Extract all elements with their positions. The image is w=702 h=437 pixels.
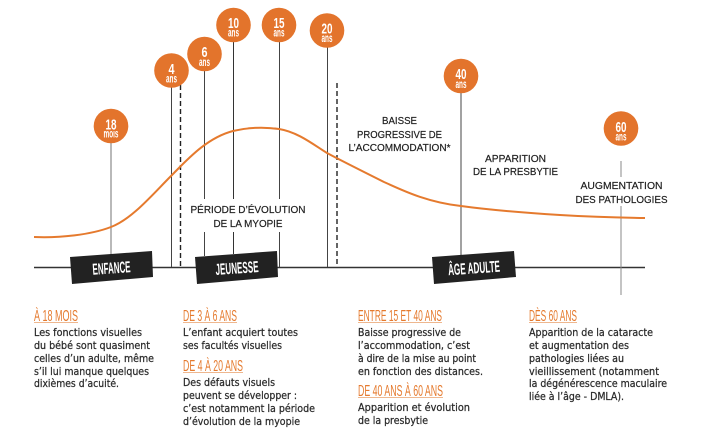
badge: 4 ans: [154, 53, 189, 88]
badge: 40 ans: ans: [456, 77, 467, 91]
heading: de 40 ans à 60 ans: DE 40 ANS À 60 ANS: [358, 383, 443, 400]
horizontal age axis: [34, 266, 645, 268]
marker line: 15 ans upper: [278, 40, 280, 199]
text: apparition de la cataracte: [529, 327, 667, 403]
text: enfant acquiert: ses facultés visuelles: [183, 340, 282, 352]
badge: 18 mois: 18: [106, 116, 116, 134]
badge: 20 ans: [310, 13, 344, 48]
text: apparition et évolution: de la presbytie: [358, 415, 428, 427]
heading: entre 15 et 40 ans: ENTRE 15 ET 40 ANS: [358, 308, 442, 325]
badge: 4 ans: ans: [166, 72, 177, 86]
text: baisse progressive: l’accommodation, c’est: [358, 340, 470, 352]
text: enfant acquiert: L’enfant acquiert toutes: [183, 327, 298, 339]
badge: 40 ans: [444, 59, 478, 93]
marker line: 10 ans upper: [232, 40, 234, 199]
marker line: 20 ans: [326, 45, 328, 267]
badge: 6 ans: 6: [202, 44, 208, 61]
text: apparition de la cataracte: vieillissement (notamment: [529, 366, 659, 378]
badge: 20 ans: ans: [322, 31, 333, 45]
text: apparition de la cataracte: la dégénérescence maculaire: [529, 378, 667, 390]
heading: de 3 à 6 ans: DE 3 À 6 ANS: [183, 308, 237, 325]
marker line: 60 ans upper: [620, 161, 622, 177]
marker line: 60 ans lower: [620, 206, 622, 295]
column: de 3 à 20 ans: [183, 308, 315, 428]
text: défauts visuels: [183, 377, 315, 428]
label: apparition de la presbytie: [473, 153, 558, 178]
marker line: 6 ans lower: [204, 232, 206, 256]
marker line: 15 ans lower: [278, 232, 280, 267]
text: apparition et évolution: Apparition et évolution: [358, 402, 470, 414]
badge: 60 ans: ans: [616, 130, 627, 144]
label: période d'évolution de la myopie: [190, 203, 306, 230]
text: fonctions visuelles: celles d’un adulte, même: [34, 353, 154, 365]
label: augmentation des pathologies: AUGMENTATION: [580, 180, 662, 192]
badge: 60 ans: [604, 111, 638, 146]
column: de 15 à 60 ans: [358, 308, 483, 427]
text: baisse progressive: à dire de la mise au point: [358, 353, 476, 365]
dashed boundary left: [180, 85, 182, 267]
label: baisse progressive de l'accommodation: L’ACCOMMODATION*: [348, 142, 450, 154]
tag: âge adulte: [432, 251, 516, 284]
label: baisse progressive de l'accommodation: PROGRESSIVE DE: [357, 129, 442, 141]
column: à 18 mois: [34, 308, 154, 390]
text: fonctions visuelles: Les fonctions visuelles: [34, 327, 142, 339]
text: apparition de la cataracte: pathologies liées au: [529, 353, 624, 365]
tag: jeunesse: [195, 251, 278, 284]
text: enfant acquiert: [183, 327, 298, 352]
label: période d'évolution de la myopie: DE LA MYOPIE: [214, 218, 282, 230]
badge: 4 ans: 4: [168, 61, 175, 78]
badge: 6 ans: ans: [199, 55, 210, 69]
badge: 18 mois: mois: [104, 126, 119, 140]
label: augmentation des pathologies: [576, 180, 668, 206]
badge: 15 ans: [262, 8, 296, 42]
badge: 40 ans: 40: [456, 66, 466, 83]
heading: de 4 à 20 ans: DE 4 À 20 ANS: [183, 358, 243, 375]
marker line: 18 mois: [110, 140, 112, 255]
text: défauts visuels: d’évolution de la myopie: [183, 416, 300, 428]
label: apparition de la presbytie: DE LA PRESBYTIE: [473, 166, 558, 178]
badge: 15 ans: 15: [274, 15, 284, 32]
label: baisse progressive de l'accommodation: [348, 115, 450, 154]
text: défauts visuels: Des défauts visuels: [183, 377, 275, 389]
badge: 20 ans: 20: [322, 20, 332, 38]
marker line: 6 ans upper: [204, 68, 206, 199]
text: baisse progressive: [358, 327, 483, 378]
text: fonctions visuelles: s’il lui manque quelques: [34, 366, 149, 378]
text: apparition et évolution: [358, 402, 470, 427]
badge: 60 ans: 60: [616, 119, 626, 136]
text: apparition de la cataracte: Apparition de la cataracte: [529, 327, 653, 339]
text: défauts visuels: c’est notamment la période: [183, 403, 315, 415]
label: baisse progressive de l'accommodation: BAISSE: [382, 115, 417, 127]
text: fonctions visuelles: du bébé sont quasiment: [34, 340, 150, 352]
badge: 10 ans: ans: [228, 26, 239, 40]
text: apparition de la cataracte: et augmentation des: [529, 340, 629, 352]
text: fonctions visuelles: [34, 327, 154, 390]
badge: 10 ans: 10: [228, 15, 239, 32]
badge: 18 mois: [94, 109, 128, 143]
marker line: 4 ans: [170, 85, 172, 267]
badge: 6 ans: [187, 37, 222, 71]
dashed boundary right: [336, 83, 338, 267]
tag: enfance: [70, 251, 153, 284]
tag: jeunesse: JEUNESSE: [215, 259, 259, 279]
text: défauts visuels: peuvent se développer :: [183, 390, 297, 402]
label: augmentation des pathologies: DES PATHOLOGIES: [576, 194, 668, 206]
column: dès 60 ans: [529, 308, 667, 403]
badge: 15 ans: ans: [274, 26, 285, 40]
badge: 10 ans: [216, 8, 251, 42]
accommodation curve: [34, 128, 645, 237]
marker line: 40 ans: [460, 90, 462, 256]
tag: âge adulte: ÂGE ADULTE: [447, 257, 501, 279]
text: apparition de la cataracte: liée à l’âge - DMLA).: [529, 391, 624, 403]
text: fonctions visuelles: dixièmes d’acuité.: [34, 378, 119, 390]
text: baisse progressive: Baisse progressive de: [358, 327, 461, 339]
heading: dès 60 ans: DÈS 60 ANS: [529, 308, 577, 325]
label: période d'évolution de la myopie: PÉRIODE D’ÉVOLUTION: [190, 203, 306, 216]
tag: enfance: ENFANCE: [92, 259, 131, 279]
text: baisse progressive: en fonction des distances.: [358, 366, 483, 378]
label: apparition de la presbytie: APPARITION: [485, 153, 546, 165]
marker line: 10 ans lower: [232, 232, 234, 254]
timeline chart: [34, 8, 668, 295]
heading: à 18 mois: À 18 MOIS: [34, 308, 78, 325]
